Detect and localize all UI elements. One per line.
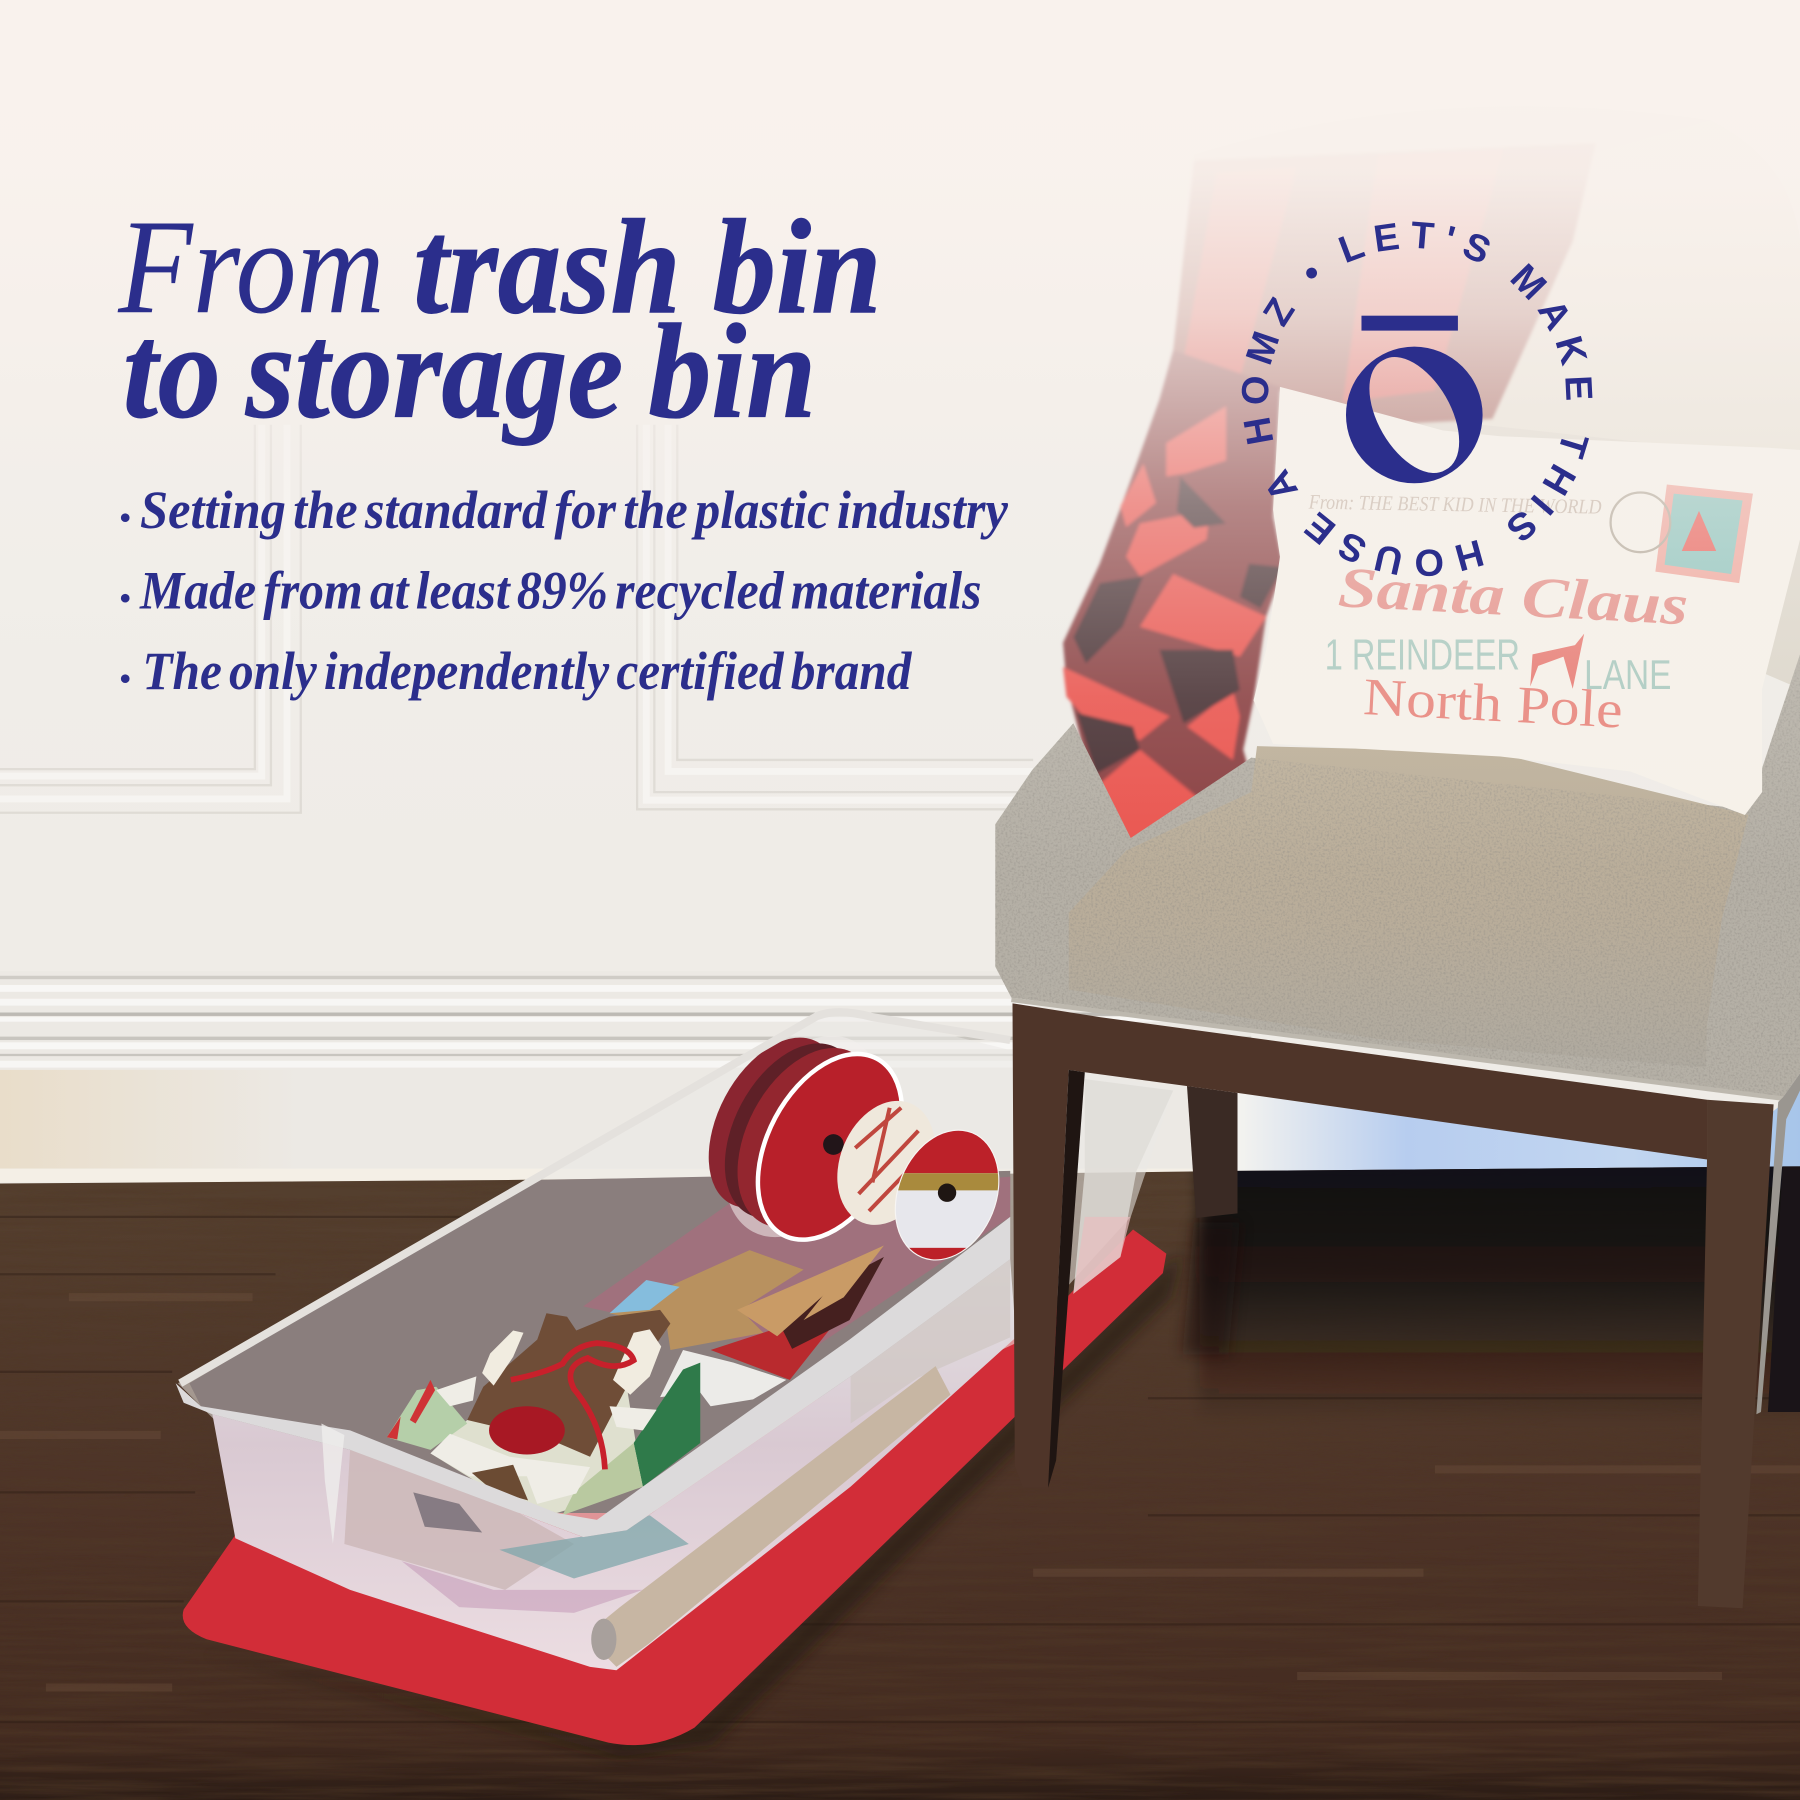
clear storage bin back bbox=[178, 1012, 1173, 1533]
logo badge bbox=[1242, 222, 1592, 576]
chair seat and arms bbox=[995, 654, 1800, 1099]
chair back bbox=[1194, 106, 1800, 689]
ribbon spools bbox=[708, 1036, 1000, 1260]
chair wooden frame and legs bbox=[1012, 1003, 1800, 1608]
gift tag bbox=[737, 1260, 851, 1336]
logo mark bar bbox=[1361, 316, 1458, 331]
logo mark ring bbox=[1346, 347, 1483, 483]
patterned paper bbox=[387, 1387, 467, 1450]
pillow lettering: LANE bbox=[1584, 652, 1671, 698]
knit reindeer ornament bbox=[430, 1310, 670, 1504]
wall glimpse under chair bbox=[1238, 1091, 1800, 1171]
decorative pillow bbox=[1254, 387, 1800, 815]
wooden floor bbox=[0, 1148, 1800, 1800]
right side chair edge bbox=[1756, 1073, 1800, 1414]
circular slogan: LET'S MAKE THIS HOUSE A HOMZ • bbox=[1242, 222, 1592, 576]
white bird paper bbox=[660, 1350, 786, 1406]
bullet 3: • bbox=[119, 660, 131, 696]
red paper bbox=[711, 1303, 851, 1380]
blanket dark squares bbox=[1073, 476, 1283, 816]
large ribbon spool bbox=[682, 1009, 935, 1267]
front wall bbox=[212, 1259, 1016, 1670]
wrapping paper and gift contents bbox=[387, 1246, 884, 1515]
clear storage bin front bbox=[176, 1012, 1016, 1670]
front wall see-through contents bbox=[344, 1450, 574, 1590]
blanket red squares bbox=[1063, 406, 1266, 849]
baseboard bbox=[0, 971, 1251, 1184]
storage bin lid bbox=[183, 1229, 1166, 1745]
bullet list bbox=[119, 480, 1009, 701]
pillow stamp bbox=[1611, 484, 1753, 583]
kraft paper bbox=[610, 1250, 804, 1350]
pillow lettering: 1 REINDEER bbox=[1325, 631, 1520, 679]
pillow lettering: From: THE BEST KID IN THE WORLD bbox=[1308, 492, 1602, 519]
pillow lettering bbox=[1308, 492, 1690, 740]
blue paper bbox=[610, 1280, 680, 1313]
title: to storage bin bbox=[123, 297, 816, 447]
green box bbox=[634, 1363, 700, 1487]
rim band bbox=[176, 1217, 1010, 1537]
wall with panel moulding bbox=[0, 0, 1800, 1194]
pillow reindeer bbox=[1530, 634, 1584, 689]
top fade overlay bbox=[0, 0, 1800, 872]
bullet 3: The only independently certified brand bbox=[142, 641, 912, 701]
bullet 1: • bbox=[119, 499, 131, 535]
paper under ornament bbox=[430, 1387, 643, 1513]
pillow lettering: North Pole bbox=[1362, 668, 1624, 740]
far rim bbox=[180, 1012, 1010, 1383]
bullet 2: Made from at least 89% recycled materials bbox=[139, 560, 982, 620]
title: From bbox=[117, 192, 385, 342]
small ribbon spool bbox=[837, 1100, 1000, 1260]
back leg bbox=[1187, 1086, 1238, 1218]
front right leg bbox=[1698, 1100, 1774, 1608]
title: trash bin bbox=[413, 192, 882, 342]
bullet 1: Setting the standard for the plastic industry bbox=[140, 480, 1009, 540]
red plaid blanket bbox=[1063, 143, 1596, 849]
front left leg and apron bbox=[1012, 1003, 1707, 1488]
bullet 2: • bbox=[119, 579, 131, 615]
pillow lettering: Santa Claus bbox=[1337, 556, 1690, 637]
title bbox=[117, 192, 882, 447]
burlap wrapping roll bbox=[595, 1366, 951, 1667]
